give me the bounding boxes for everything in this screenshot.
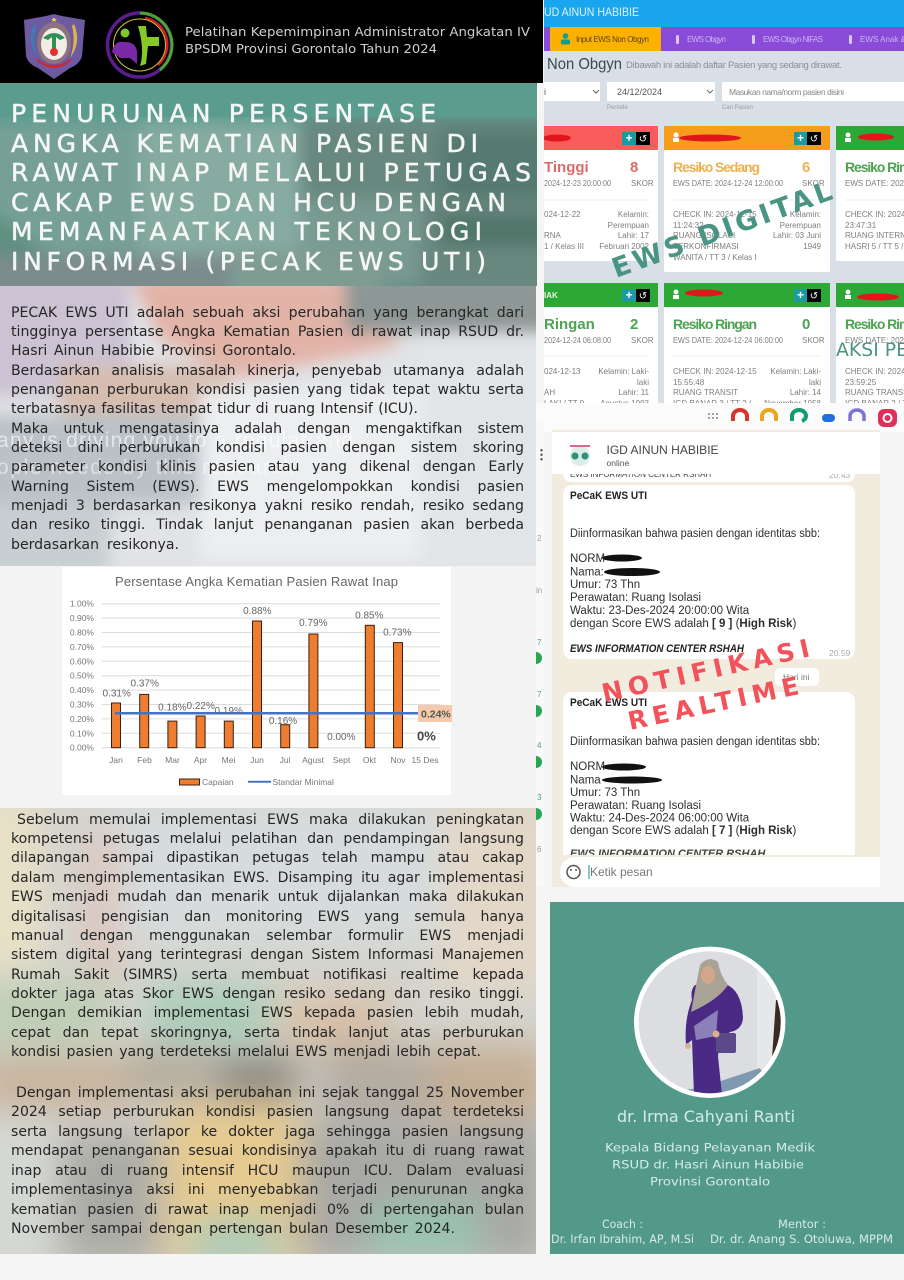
text: terbatasnya fasilitas tempat tidur di ruang Intensif (ICU). xyxy=(11,401,418,417)
message bubble 23 Des: EWS INFORMATION CENTER RSHAH xyxy=(570,643,745,655)
text block: intro paragraphs xyxy=(11,305,524,553)
card: resiko ringan skor 0: Resiko Ringan xyxy=(673,316,757,332)
panel: first text block background photo: any is driving you to a regular and xyxy=(0,429,353,452)
panel: title background photo xyxy=(0,83,537,286)
card: resiko ringan skor 2: LAKI / TT 9 xyxy=(544,399,585,408)
text: Maka untuk mengatasinya adalah dengan mengaktifkan sistem xyxy=(11,421,524,437)
panel: whatsapp side strip: 6 xyxy=(537,845,542,854)
text: Dengan implementasi aksi perubahan ini sejak tanggal 25 November xyxy=(16,1085,524,1101)
x axis labels: Sept xyxy=(333,755,351,765)
card: resiko ringan skor 0: SKOR xyxy=(802,336,825,345)
text: sistem digital yang terintegrasi dengan Sistem Informasi Manajemen xyxy=(11,947,524,963)
card: resiko tinggi: Lahir: 17 xyxy=(618,231,650,240)
y axis labels: 1.00% xyxy=(70,599,94,609)
card: resiko ringan skor 2: laki xyxy=(637,378,649,387)
card: resiko ringan skor 2: AH xyxy=(544,388,555,397)
text: menjadi 3 berdasarkan resikonya yakni resiko rendah, resiko sedang xyxy=(11,498,524,514)
message bubble 24 Des: Nama xyxy=(570,774,601,786)
text: Hasri Ainun Habibie Provinsi Gorontalo. xyxy=(11,343,296,359)
legend: Standar Minimal xyxy=(272,777,334,787)
author role xyxy=(605,1140,815,1188)
text: dalam mengimplementasikan EWS. Disamping itu agar implementasi xyxy=(11,870,524,886)
x axis labels: Feb xyxy=(137,755,152,765)
author role: Kepala Bidang Pelayanan Medik xyxy=(605,1140,815,1154)
card: resiko ringan bottom right: 23:59:25 xyxy=(845,378,877,387)
author name: dr. Irma Cahyani Ranti xyxy=(617,1107,795,1126)
y axis labels xyxy=(70,599,94,753)
text: cepat dan tepat skoringnya, serta tindak lanjut atas perburukan xyxy=(11,1025,524,1041)
app navigation tabs: EWS Obgyn NIFAS xyxy=(763,35,823,44)
data labels: 0.37% xyxy=(131,678,159,690)
text: PECAK EWS UTI adalah sebuah aksi perubahan yang berangkat dari xyxy=(11,305,524,321)
x axis labels xyxy=(109,755,438,765)
message bubble 23 Des: Nama: xyxy=(570,566,604,578)
card: resiko ringan skor 0: EWS DATE: 2024-12-24 06:00:00 xyxy=(673,336,784,345)
panel: whatsapp side strip: ⋮ xyxy=(535,447,548,462)
x axis labels: Mei xyxy=(222,755,235,765)
x axis labels: Nov xyxy=(390,755,406,765)
app filter inputs: Cari Pasien xyxy=(722,105,753,111)
x axis labels: Okt xyxy=(363,755,377,765)
panel: first text block background photo xyxy=(0,286,536,566)
message bubble 24 Des: EWS INFORMATION CENTER RSHAH xyxy=(570,848,766,860)
y axis labels: 0.30% xyxy=(70,700,94,710)
data labels xyxy=(103,606,412,743)
card: resiko ringan skor 0: + xyxy=(797,288,804,302)
text: 2024 setiap perburukan kondisi pasien langsung dapat terdeteksi xyxy=(11,1104,524,1120)
header text: Pelatihan Kepemimpinan Administrator Angkatan IV xyxy=(185,24,530,39)
app filter inputs: 24/12/2024 xyxy=(617,87,662,97)
y axis labels: 0.20% xyxy=(70,714,94,724)
card: resiko sedang: TERKONFIRMASI xyxy=(673,242,739,251)
mentor: Dr. dr. Anang S. Otoluwa, MPPM xyxy=(710,1232,893,1246)
coach: Coach : xyxy=(602,1217,643,1231)
chat header: online xyxy=(606,458,629,468)
card: resiko tinggi: + xyxy=(625,131,633,145)
card: resiko ringan skor 0: laki xyxy=(809,378,821,387)
card: resiko sedang xyxy=(664,126,830,272)
app page heading: Non Obgyn xyxy=(547,56,622,73)
author role: Provinsi Gorontalo xyxy=(650,1174,770,1188)
data labels: 0.18% xyxy=(158,702,187,714)
card: resiko ringan skor 0: November 1958 xyxy=(764,399,822,408)
card: resiko ringan skor 2: Lahir: 11 xyxy=(618,388,650,397)
chat header xyxy=(552,432,880,474)
app header bar: UD AINUN HABIBIE xyxy=(544,5,639,19)
card: resiko ringan skor 0: IGD BANAR 3 / TT 2 / xyxy=(673,399,752,408)
icon: provincial shield logo xyxy=(24,14,85,79)
data labels: 0.31% xyxy=(103,688,131,700)
app filter inputs: Masukan nama/norm pasien disini xyxy=(729,87,844,97)
text: parameter kondisi klinis pasien atau yang dikenal dengan Early xyxy=(11,459,524,475)
message bubble 23 Des: NORM xyxy=(570,553,605,565)
data labels: 0.88% xyxy=(243,606,272,617)
text: tingginya persentase Angka Kematian Pasien di rawat inap RSUD dr. xyxy=(11,324,524,340)
title: RAWAT INAP MELALUI PETUGAS xyxy=(11,158,531,187)
data labels: 0.79% xyxy=(299,618,328,629)
card: resiko sedang: 6 xyxy=(802,159,810,176)
x axis labels: Mar xyxy=(165,755,180,765)
previous bubble xyxy=(563,474,855,482)
message bubble 23 Des: PeCaK EWS UTI xyxy=(570,490,647,502)
panel: chart zone background xyxy=(0,566,536,808)
date chip: hari ini: Hari ini xyxy=(783,672,810,682)
data labels: 0.73% xyxy=(383,628,412,638)
message bubble 23 Des: Diinformasikan bahwa pasien dengan identitas sbb: xyxy=(570,528,820,540)
text: inap atau di ruang intensif HCU maupun ICU. Dalam evaluasi xyxy=(11,1163,524,1179)
bars xyxy=(112,621,402,748)
app page heading xyxy=(548,58,842,72)
card: resiko ringan skor 2: SKOR xyxy=(631,336,654,345)
app header bar xyxy=(544,0,904,27)
mentor xyxy=(710,1217,893,1246)
card: resiko sedang: 1949 xyxy=(803,242,822,251)
panel: whatsapp side strip xyxy=(535,420,548,886)
callout: 0.24% target xyxy=(418,705,452,722)
previous bubble: EWS INFORMATION CENTER RSHAH xyxy=(570,470,711,479)
card: resiko ringan skor 2: + xyxy=(625,288,633,302)
card: resiko tinggi: SKOR xyxy=(631,179,654,188)
date chip: hari ini xyxy=(775,668,819,686)
card: resiko sedang: + xyxy=(797,131,804,145)
data labels: 0.19% xyxy=(215,706,243,717)
title xyxy=(11,99,531,276)
card: resiko sedang: Kelamin: xyxy=(790,210,821,219)
chart title: Persentase Angka Kematian Pasien Rawat Inap xyxy=(115,574,398,589)
y axis labels: 0.40% xyxy=(70,685,94,695)
card: resiko sedang: SKOR xyxy=(802,179,825,188)
message bubble 24 Des xyxy=(563,692,855,864)
card: resiko ringan skor 0: RUANG TRANSIT xyxy=(673,388,738,397)
data labels: 0.00% xyxy=(327,732,356,743)
text: mendapat penanganan sesuai kondisinya apakah itu di ruang rawat xyxy=(11,1143,524,1159)
x axis labels: Jul xyxy=(280,755,291,765)
header banner xyxy=(0,0,543,83)
message bubble 24 Des: Perawatan: Ruang Isolasi xyxy=(570,800,701,812)
card: resiko tinggi: Februari 2002 xyxy=(599,242,650,251)
message bubble 23 Des: Perawatan: Ruang Isolasi xyxy=(570,592,701,604)
card: resiko tinggi: RNA xyxy=(544,231,562,240)
label: EWS digital stamp: EWS DIGITAL xyxy=(608,176,836,285)
card: resiko ringan skor 0 xyxy=(664,283,830,413)
card: resiko sedang: Resiko Sedang xyxy=(673,159,760,175)
card: resiko ringan skor 2: Ringan xyxy=(544,316,595,333)
text: implementasinya aksi ini menyebabkan terjadi penurunan angka xyxy=(11,1182,524,1198)
card: resiko ringan skor 0: Kelamin: Laki- xyxy=(770,367,821,376)
text: Rumah Sakit (SIMRS) serta membuat notifikasi realtime kepada xyxy=(11,967,524,983)
card: resiko tinggi: 024-12-22 xyxy=(544,210,581,219)
text: dilapangan sampai dipastikan petugas telah mampu atau cakap xyxy=(11,850,524,866)
card: resiko ringan skor 0: 0 xyxy=(802,316,810,333)
app filter inputs: i xyxy=(544,87,546,97)
icon: ring health logo xyxy=(108,13,172,77)
card: resiko tinggi: 1 / Kelas III xyxy=(544,242,584,251)
y axis labels: 0.70% xyxy=(70,642,94,652)
card: resiko ringan bottom right xyxy=(836,283,904,413)
panel: whatsapp side strip: 7 xyxy=(537,638,542,647)
panel: first text block background photo: ople needs by this research xyxy=(0,456,295,479)
card: resiko ringan skor 2: IAK xyxy=(544,291,558,300)
x axis labels: Jun xyxy=(250,755,264,765)
message bubble 24 Des: Diinformasikan bahwa pasien dengan identitas sbb: xyxy=(570,736,820,748)
card: resiko sedang: CHECK IN: 2024-12-15 xyxy=(673,210,757,219)
title: CAKAP EWS DAN HCU DENGAN xyxy=(11,188,506,217)
card: resiko sedang: ↺ xyxy=(810,134,818,145)
y axis labels: 0.00% xyxy=(70,743,94,753)
card: resiko ringan top right xyxy=(836,126,904,261)
app navigation tabs: EWS Obgyn xyxy=(687,35,726,44)
title: MEMANFAATKAN TEKNOLOGI xyxy=(11,217,482,246)
text: Berdasarkan analisis masalah kinerja, penyebab utamanya adalah xyxy=(11,363,524,379)
card: resiko tinggi: Kelamin: xyxy=(618,210,649,219)
panel: whatsapp side strip: 3 xyxy=(537,793,542,802)
message bubble 24 Des: Waktu: 24-Des-2024 06:00:00 Wita xyxy=(570,812,750,824)
card: resiko ringan skor 2: Kelamin: Laki- xyxy=(598,367,649,376)
card: resiko sedang: WANITA / TT 3 / Kelas I xyxy=(673,253,757,262)
y axis labels: 0.80% xyxy=(70,628,94,638)
chat header: IGD AINUN HABIBIE xyxy=(606,443,719,457)
message bubble 24 Des: NORM xyxy=(570,761,605,773)
message bubble 23 Des: Umur: 73 Thn xyxy=(570,579,640,591)
bar chart: persentase angka kematian xyxy=(62,567,452,795)
y axis labels: 0.50% xyxy=(70,671,94,681)
card: resiko tinggi: Tinggi xyxy=(544,159,589,176)
app navigation tabs xyxy=(544,27,904,51)
text: Dengan demikian implementasi EWS kepada pasien lebih mudah, xyxy=(11,1005,524,1021)
card: resiko ringan skor 2 xyxy=(544,283,658,403)
text: digitalisasi pengisian dan monitoring EWS yang semula hanya xyxy=(11,909,524,925)
callout: 0.24% target: 0.24% xyxy=(421,708,451,720)
x axis labels: Jan xyxy=(109,755,123,765)
card: resiko ringan skor 0: ↺ xyxy=(810,291,818,302)
author role: RSUD dr. Hasri Ainun Habibie xyxy=(612,1158,804,1172)
message bubble 24 Des: dengan Score EWS adalah [ 7 ] (High Risk) xyxy=(570,825,796,837)
card: resiko ringan skor 2: ↺ xyxy=(639,291,647,302)
card: resiko sedang: EWS DATE: 2024-12-24 12:00:00 xyxy=(673,179,784,188)
text: serta langsung terlapor ke dokter jaga sehingga pasien langsung xyxy=(11,1124,524,1140)
app filter inputs: Periode xyxy=(607,105,628,111)
header text: BPSDM Provinsi Gorontalo Tahun 2024 xyxy=(185,41,437,56)
text: kondisi pasien yang terdeteksi melalui EWS menjadi lebih cepat. xyxy=(11,1044,481,1060)
y axis labels: 0.10% xyxy=(70,728,94,738)
text: Sebelum memulai implementasi EWS maka dilakukan peningkatan xyxy=(17,812,524,828)
card: resiko ringan skor 0: 15:55:48 xyxy=(673,378,705,387)
y axis labels: 0.60% xyxy=(70,656,94,666)
panel: whatsapp side strip: 7 xyxy=(537,690,542,699)
card: resiko sedang: RUANG ISOLASI xyxy=(673,231,735,240)
mentor: Mentor : xyxy=(778,1217,826,1231)
title: ANGKA KEMATIAN PASIEN DI xyxy=(11,129,478,158)
message bubble 24 Des: Umur: 73 Thn xyxy=(570,787,640,799)
text: kompetensi petugas melalui pelatihan dan pendampingan langsung xyxy=(11,831,524,847)
x axis labels: 15 Des xyxy=(412,755,438,765)
title: PENURUNAN PERSENTASE xyxy=(11,99,436,128)
legend: Capaian xyxy=(202,777,234,787)
panel: whatsapp side strip: 2 xyxy=(537,534,542,543)
card: resiko tinggi xyxy=(544,126,658,261)
text: manual dengan menggunakan selembar formulir EWS menjadi xyxy=(11,928,524,944)
text: dan resiko tinggi. Tindak lanjut penanganan pasien akan berbeda xyxy=(11,517,524,533)
card: resiko ringan skor 0: CHECK IN: 2024-12-15 xyxy=(673,367,757,376)
text: November sampai dengan pertengan bulan Desember 2024. xyxy=(11,1221,455,1237)
app filter inputs xyxy=(544,82,904,111)
text: dokter jaga atas Skor EWS dengan resiko sedang dan resiko tinggi. xyxy=(11,986,524,1002)
coach xyxy=(551,1217,694,1246)
card: resiko sedang: Lahir: 03 Juni xyxy=(773,231,821,240)
card: resiko tinggi: Perempuan xyxy=(608,221,649,230)
text: berdasarkan resikonya. xyxy=(11,537,179,553)
app page heading: Dibawah ini adalah daftar Pasien yang sedang dirawat. xyxy=(626,60,842,71)
card: resiko ringan skor 2: 024-12-13 xyxy=(544,367,581,376)
panel: EWS digital app screenshot xyxy=(530,0,904,413)
x axis labels: Agust xyxy=(302,755,324,765)
data labels: 0.16% xyxy=(269,716,297,727)
text: EWS menjadi mudah dan menarik untuk dijalankan maka dilakukan xyxy=(11,889,524,905)
text block: implementation paragraph xyxy=(11,812,524,1060)
message bubble 23 Des xyxy=(563,485,855,659)
panel: whatsapp side strip: 4 xyxy=(537,741,542,750)
chat input bar: Ketik pesan xyxy=(590,865,653,879)
data labels: 0.22% xyxy=(187,701,215,712)
header text xyxy=(185,24,530,56)
coach: Dr. Irfan Ibrahim, AP, M.Si xyxy=(551,1232,694,1246)
label: notifikasi realtime stamp: NOTIFIKASI xyxy=(599,634,812,708)
data labels: 0.85% xyxy=(355,610,384,622)
text: kematian pasien di rawat inap menjadi 0% di pertengahan bulan xyxy=(11,1202,524,1218)
message bubble 23 Des: Waktu: 23-Des-2024 20:00:00 Wita xyxy=(570,605,750,617)
panel: phone dock with app icons xyxy=(536,403,904,432)
panel: author profile xyxy=(550,902,904,1254)
legend xyxy=(180,777,334,787)
y axis labels: 0.90% xyxy=(70,613,94,623)
text block: results paragraph xyxy=(11,1085,524,1237)
label: notifikasi realtime stamp: REALTIME xyxy=(625,671,801,736)
author photo xyxy=(630,945,790,1100)
message bubble 23 Des: 20.59 xyxy=(829,648,851,658)
panel: second text block background photo xyxy=(0,808,536,1254)
x axis labels: Apr xyxy=(194,755,207,765)
card: resiko ringan skor 2: 2024-12-24 06:08:00 xyxy=(544,336,611,345)
card: resiko sedang: 11:24:32 xyxy=(673,221,704,230)
text: penanganan perburukan kondisi pasien yang tidak tepat waktu serta xyxy=(11,382,524,398)
message bubble 23 Des: dengan Score EWS adalah [ 9 ] (High Risk) xyxy=(570,618,796,630)
previous bubble: 20.43 xyxy=(829,470,851,480)
card: resiko tinggi: ↺ xyxy=(639,134,647,145)
panel: whatsapp side strip: in xyxy=(536,586,542,595)
app navigation tabs: Input EWS Non Obgyn xyxy=(576,35,649,44)
card: resiko tinggi: 8 xyxy=(630,159,638,176)
callout: 0% december: 0% xyxy=(417,728,436,744)
card: resiko ringan skor 2: Agustus 1993 xyxy=(600,399,650,408)
line: standar minimal xyxy=(115,712,418,715)
card: resiko ringan top right: 23:47:31 xyxy=(845,221,877,230)
card: resiko tinggi: 2024-12-23 20:00:00 xyxy=(544,179,611,188)
card: resiko ringan skor 0: Lahir: 14 xyxy=(790,388,822,397)
card: resiko sedang: Perempuan xyxy=(780,221,821,230)
text: Warning Sistem (EWS). EWS mengelompokkan kondisi pasien xyxy=(11,479,524,495)
message bubble 24 Des: PeCaK EWS UTI xyxy=(570,697,647,709)
text: deteksi dini perburukan kondisi pasien dengan sistem skoring xyxy=(11,440,524,456)
chat input bar xyxy=(560,857,880,887)
card: resiko ringan skor 2: 2 xyxy=(630,316,638,333)
title: INFORMASI (PECAK EWS UTI) xyxy=(11,247,486,276)
panel: whatsapp chat screenshot xyxy=(552,430,880,887)
